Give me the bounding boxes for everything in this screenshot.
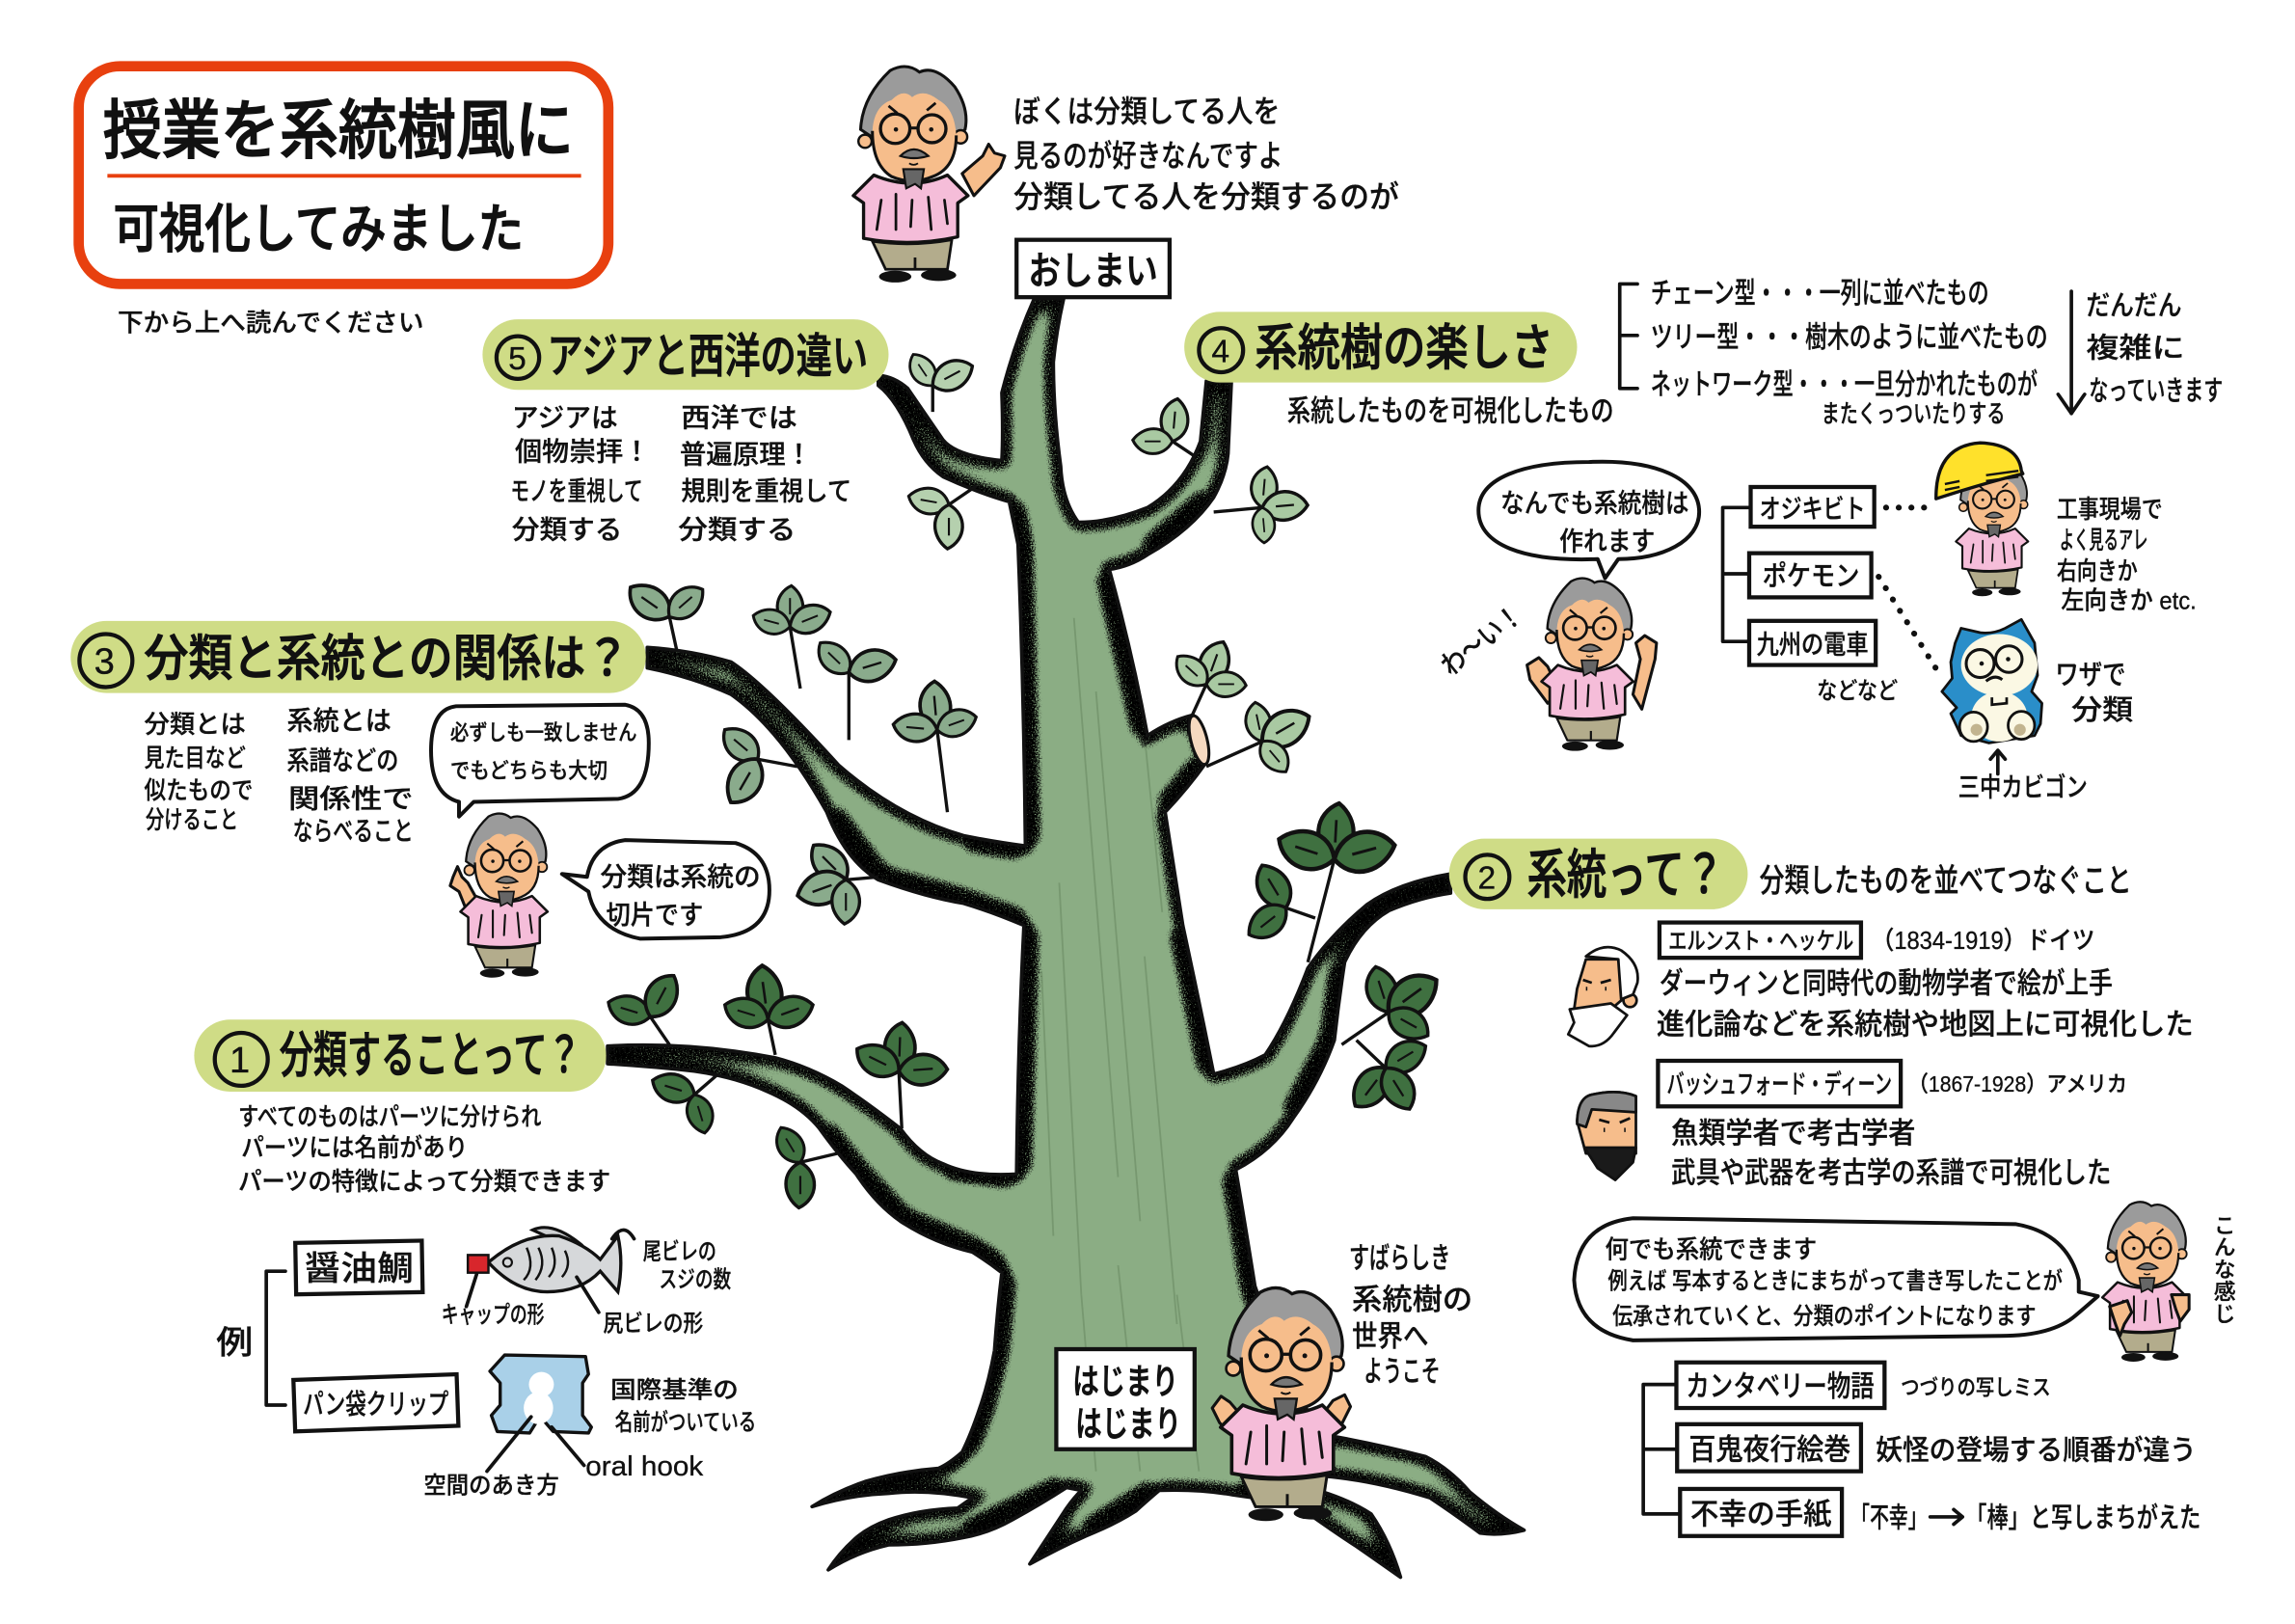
speech bubble: slice bbox=[562, 840, 770, 938]
text: West: 規則を重視して bbox=[681, 476, 851, 506]
box: bread clip bbox=[293, 1374, 458, 1431]
dotted connector: worker bbox=[1886, 505, 1928, 509]
list: tree types: またくっついたりする bbox=[1822, 401, 2005, 428]
text: West: 分類する bbox=[678, 514, 796, 544]
heading 2 bbox=[1449, 839, 1747, 909]
character: pointing bbox=[450, 814, 548, 978]
box: pokemon: ポケモン bbox=[1763, 561, 1859, 592]
cut branch stump bbox=[1185, 714, 1213, 767]
sign: beginning bbox=[1056, 1349, 1195, 1449]
character: cheering bbox=[1527, 579, 1657, 751]
fish labels: 尾ビレの bbox=[643, 1239, 716, 1265]
text: phylogeny defined: 関係性で bbox=[288, 784, 414, 814]
leaves: branch 2 bbox=[1241, 802, 1445, 1116]
speech bubble: anything bbox=[1478, 462, 1699, 579]
text: gradually complex: 複雑に bbox=[2086, 334, 2185, 365]
text: by moves: ワザで bbox=[2055, 660, 2126, 690]
clip labels: 国際基準の bbox=[610, 1377, 739, 1403]
text: chain letter note: 「不幸」 bbox=[1850, 1503, 1928, 1534]
box: kyushu trains bbox=[1749, 621, 1876, 665]
text: welcome: 世界へ bbox=[1352, 1320, 1428, 1353]
text: heading 4 note: 系統したものを可視化したもの bbox=[1287, 394, 1614, 427]
text: parts bbox=[238, 1103, 610, 1196]
diagram connector bbox=[1723, 507, 1751, 641]
box: Haeckel bbox=[1660, 923, 1861, 958]
fish labels: スジの数 bbox=[659, 1267, 731, 1293]
list: tree types: ネットワーク型・・・一旦分かれたものが bbox=[1651, 368, 2038, 401]
text: West bbox=[678, 402, 851, 544]
text: Asia bbox=[510, 402, 650, 544]
character: thumbs down bbox=[2102, 1202, 2189, 1362]
text: parts: パーツの特徴によって分類できます bbox=[238, 1168, 610, 1196]
text: welcome: すばらしき bbox=[1349, 1242, 1450, 1275]
text: worker note: よく見るアレ bbox=[2060, 528, 2147, 555]
clip pointers bbox=[487, 1417, 584, 1472]
bracket: examples bbox=[266, 1271, 285, 1405]
speech bubble: not always: でもどちらも大切 bbox=[450, 758, 608, 783]
speech bubble: anything: 作れます bbox=[1559, 527, 1655, 556]
box: soy sauce fish: 醤油鯛 bbox=[305, 1250, 414, 1287]
text: wow: わ〜い！ bbox=[1436, 600, 1529, 682]
heading 5: 5 bbox=[508, 341, 526, 377]
clip labels bbox=[423, 1377, 756, 1500]
text: welcome bbox=[1349, 1242, 1472, 1389]
portrait: Dean bbox=[1577, 1092, 1636, 1180]
top character speech: 見るのが好きなんですよ bbox=[1013, 138, 1282, 173]
heading 2: 系統って？ bbox=[1527, 845, 1724, 905]
text: phylogeny defined bbox=[287, 706, 414, 846]
arrow: increasing complexity bbox=[2058, 291, 2085, 414]
sign: beginning: はじまり bbox=[1072, 1362, 1178, 1401]
text: Dean description: 魚類学者で考古学者 bbox=[1671, 1117, 1915, 1150]
label: example: 例 bbox=[216, 1325, 253, 1362]
text: worker note: 左向きか etc. bbox=[2061, 587, 2197, 615]
text: classification defined: 分けること bbox=[146, 806, 238, 834]
heading 3 bbox=[70, 621, 646, 693]
fish labels: 尻ビレの形 bbox=[604, 1312, 703, 1338]
fish pointers bbox=[467, 1230, 634, 1313]
text: Asia: 個物崇拝！ bbox=[515, 437, 650, 467]
text: phylogeny defined: 系譜などの bbox=[287, 745, 398, 775]
icon: bread clip bbox=[490, 1355, 591, 1433]
heading 2: 2 bbox=[1478, 860, 1496, 896]
text: worker note: 右向きか bbox=[2057, 557, 2138, 585]
text: West: 普遍原理！ bbox=[680, 440, 812, 470]
top character speech: 分類してる人を分類するのが bbox=[1013, 179, 1399, 214]
text: classification defined: 似たもので bbox=[145, 777, 253, 804]
text: gradually complex: だんだん bbox=[2086, 290, 2182, 321]
top character speech bbox=[1013, 95, 1399, 214]
text: welcome: ようこそ bbox=[1364, 1356, 1441, 1389]
box: Canterbury bbox=[1676, 1363, 1884, 1408]
sign: beginning: はじまり bbox=[1075, 1404, 1181, 1444]
leaves: branch 5 bbox=[903, 348, 978, 549]
text: classification defined: 分類とは bbox=[145, 711, 246, 739]
text: Dean description: 武具や武器を考古学の系譜で可視化した bbox=[1671, 1157, 2111, 1190]
box: Dean bbox=[1658, 1061, 1901, 1106]
monster character bbox=[1942, 619, 2042, 743]
text: Dean description bbox=[1671, 1117, 2111, 1190]
text: Haeckel description: ダーウィンと同時代の動物学者で絵が上手 bbox=[1660, 967, 2113, 1000]
text: chain letter note bbox=[1850, 1503, 2200, 1534]
box: soy sauce fish bbox=[295, 1240, 422, 1294]
box: ojikibito bbox=[1751, 487, 1875, 527]
reading note: 下から上へ読んでください bbox=[118, 309, 423, 337]
top character speech: ぼくは分類してる人を bbox=[1013, 95, 1280, 129]
text: West: 西洋では bbox=[681, 402, 797, 432]
text: etc: などなど bbox=[1817, 679, 1898, 705]
text: phylogeny defined: 系統とは bbox=[287, 706, 392, 736]
box: kyushu trains: 九州の電車 bbox=[1757, 629, 1869, 659]
heading 1: 1 bbox=[230, 1040, 250, 1081]
tree bbox=[608, 299, 1525, 1577]
speech bubble: copying: 伝承されていくと、分類のポイントになります bbox=[1612, 1304, 2036, 1330]
text: phylogeny defined: ならべること bbox=[293, 816, 414, 846]
text: by moves bbox=[2055, 660, 2133, 726]
title line 2: 可視化してみました bbox=[113, 199, 524, 258]
heading 4 bbox=[1184, 311, 1577, 383]
sign: end: おしまい bbox=[1028, 250, 1158, 292]
box: Canterbury: カンタベリー物語 bbox=[1686, 1370, 1875, 1403]
text: Haeckel description: 進化論などを系統樹や地図上に可視化した bbox=[1657, 1009, 2194, 1042]
character: welcoming bbox=[1212, 1287, 1351, 1521]
dotted connector: monster bbox=[1878, 577, 1937, 671]
box: pokemon bbox=[1749, 554, 1872, 597]
portrait: Haeckel bbox=[1568, 947, 1637, 1046]
speech bubble: copying: 何でも系統できます bbox=[1605, 1235, 1817, 1263]
fish labels: キャップの形 bbox=[442, 1303, 544, 1329]
text: Asia: アジアは bbox=[512, 402, 618, 432]
box: chain letter: 不幸の手紙 bbox=[1690, 1499, 1831, 1531]
text: Haeckel description bbox=[1657, 967, 2194, 1042]
heading 5: アジアと西洋の違い bbox=[548, 331, 868, 383]
text: parts: パーツには名前があり bbox=[241, 1134, 468, 1162]
box: ojikibito: オジキビト bbox=[1760, 494, 1866, 524]
speech bubble: not always: 必ずしも一致しません bbox=[450, 719, 637, 744]
heading 3: 3 bbox=[94, 641, 115, 683]
clip labels: 空間のあき方 bbox=[423, 1474, 559, 1500]
text: chain letter note: 「棒」と写しまちがえた bbox=[1965, 1503, 2200, 1534]
text: gradually complex bbox=[2086, 290, 2223, 407]
text: Asia: 分類する bbox=[512, 514, 622, 544]
bracket: tree types bbox=[1620, 284, 1637, 389]
connector: copying examples bbox=[1643, 1385, 1680, 1514]
box: bread clip: パン袋クリップ bbox=[303, 1390, 448, 1421]
heading 5 bbox=[482, 319, 888, 390]
text: welcome: 系統樹の bbox=[1352, 1284, 1472, 1316]
text: worker note: 工事現場で bbox=[2057, 496, 2163, 524]
text: classification defined bbox=[145, 711, 253, 834]
text: monster name: 三中カビゴン bbox=[1958, 771, 2088, 801]
text: parts: すべてのものはパーツに分けられ bbox=[238, 1103, 541, 1131]
title panel bbox=[79, 67, 608, 284]
title line 1: 授業を系統樹風に bbox=[103, 95, 574, 168]
sign: end bbox=[1016, 240, 1170, 297]
speech bubble: anything: なんでも系統樹は bbox=[1500, 488, 1688, 518]
leaves: branch 4 and stump bbox=[1133, 397, 1316, 779]
speech bubble: slice: 切片です bbox=[607, 900, 703, 930]
heading 3: 分類と系統との関係は？ bbox=[145, 630, 630, 686]
leaves: branch 1 bbox=[604, 963, 949, 1207]
box: Haeckel: エルンスト・ヘッケル bbox=[1668, 929, 1853, 955]
arrow: to monster bbox=[1990, 750, 2005, 773]
clip labels: oral hook bbox=[585, 1451, 704, 1482]
box: Hyakki bbox=[1677, 1424, 1861, 1472]
clip labels: 名前がついている bbox=[615, 1410, 756, 1436]
leaves: branch 3 bbox=[621, 576, 980, 924]
heading 1 bbox=[194, 1019, 607, 1092]
top character bbox=[853, 67, 1005, 283]
text: Dean dates: （1867-1928）アメリカ bbox=[1908, 1071, 2127, 1096]
box: chain letter bbox=[1680, 1489, 1842, 1536]
text: Haeckel dates: （1834-1919）ドイツ bbox=[1872, 928, 2095, 955]
heading 4: 4 bbox=[1211, 334, 1229, 369]
list: tree types bbox=[1651, 277, 2048, 428]
text: heading 2 note: 分類したものを並べてつなぐこと bbox=[1760, 863, 2132, 900]
text: Hyakki note: 妖怪の登場する順番が違う bbox=[1876, 1435, 2197, 1466]
speech bubble: copying bbox=[1574, 1218, 2098, 1340]
box: Dean: バッシュフォード・ディーン bbox=[1667, 1069, 1892, 1099]
text: like this: こんな感じ bbox=[2210, 1214, 2236, 1324]
list: tree types: ツリー型・・・樹木のように並べたもの bbox=[1651, 321, 2048, 354]
text: by moves: 分類 bbox=[2071, 695, 2133, 726]
icon: soy sauce fish bbox=[468, 1228, 621, 1292]
fish labels bbox=[442, 1239, 731, 1338]
list: tree types: チェーン型・・・一列に並べたもの bbox=[1651, 277, 1989, 310]
heading 4: 系統樹の楽しさ bbox=[1255, 319, 1553, 375]
box: Hyakki: 百鬼夜行絵巻 bbox=[1688, 1433, 1850, 1466]
text: gradually complex: なっていきます bbox=[2089, 376, 2223, 407]
text: classification defined: 見た目など bbox=[145, 744, 246, 772]
speech bubble: not always bbox=[431, 705, 649, 817]
speech bubble: slice: 分類は系統の bbox=[600, 861, 761, 891]
text: worker note bbox=[2057, 496, 2197, 615]
character: bowing worker bbox=[1936, 443, 2028, 596]
speech bubble: copying: 例えば 写本するときにまちがって書き写したことが bbox=[1608, 1268, 2063, 1294]
text: Canterbury note: つづりの写しミス bbox=[1901, 1374, 2051, 1399]
text: Asia: モノを重視して bbox=[510, 476, 643, 506]
heading 1: 分類することって？ bbox=[280, 1027, 581, 1083]
